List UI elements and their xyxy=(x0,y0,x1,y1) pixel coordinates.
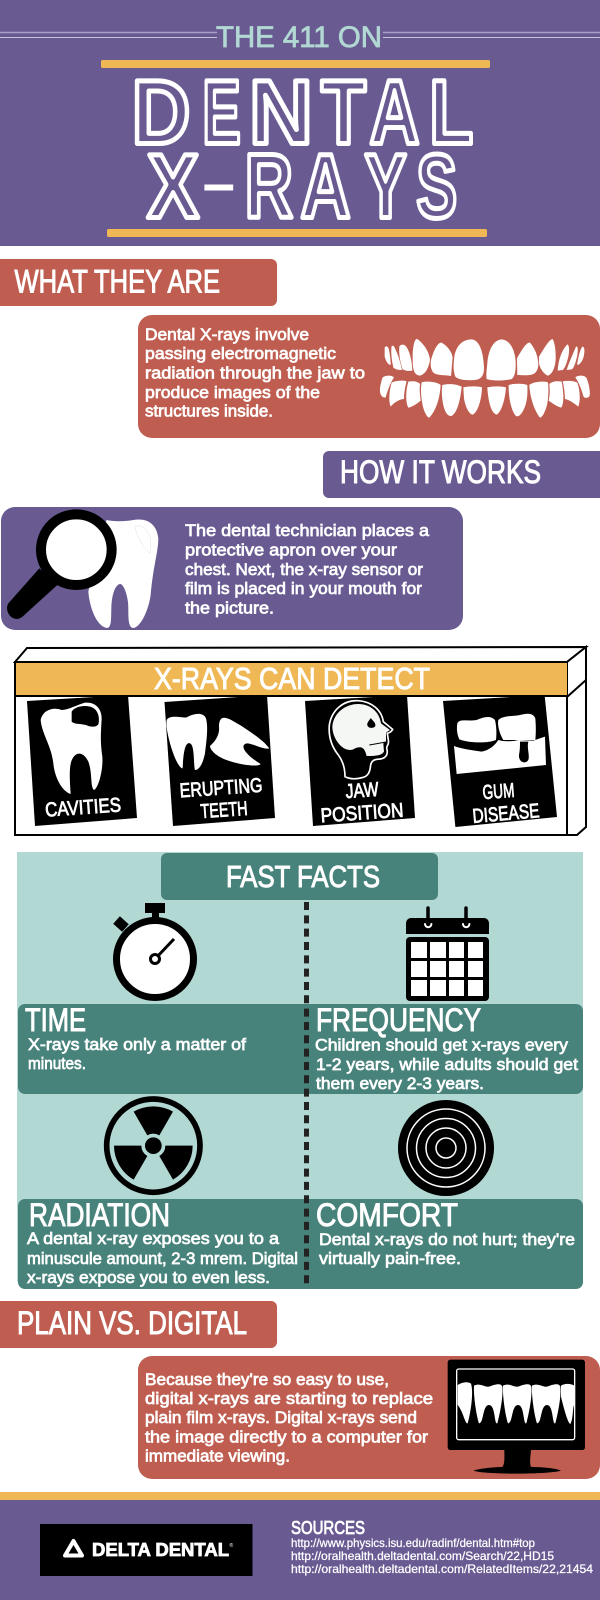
logo: delta dental: ® xyxy=(230,1542,234,1549)
card: gum disease: GUM xyxy=(482,780,515,804)
icon: target xyxy=(398,1100,494,1196)
footer xyxy=(0,1492,600,1600)
icon: teeth xyxy=(380,339,590,418)
icon: monitor with dental x-ray xyxy=(448,1360,585,1474)
title line two: X xyxy=(147,136,199,238)
card: jaw position: JAW xyxy=(345,779,379,803)
frequency text xyxy=(315,1002,578,1093)
panel: x-rays can detect xyxy=(15,647,586,835)
card: gum disease xyxy=(443,695,557,828)
title line one: T xyxy=(321,62,366,164)
box: radiation and comfort xyxy=(18,1197,583,1289)
card: erupting teeth xyxy=(164,695,275,826)
icon: magnifying glass over tooth xyxy=(7,514,158,628)
box: time and frequency xyxy=(18,1002,583,1094)
title line one: A xyxy=(370,62,420,164)
heading: how it works xyxy=(323,451,600,498)
sources: http://www.physics.isu.edu/radinf/dental.htm#top xyxy=(291,1536,535,1550)
panel: how it works xyxy=(1,507,463,630)
bottom yellow bar xyxy=(107,229,487,237)
title line one: L xyxy=(429,62,473,164)
text block xyxy=(145,1371,433,1466)
radiation text: minuscule amount, 2-3 mrem. Digital xyxy=(27,1250,298,1268)
frequency text: Children should get x-rays every xyxy=(315,1036,569,1054)
text block: chest. Next, the x-ray sensor or xyxy=(185,561,424,579)
panel: fast facts xyxy=(17,852,583,1289)
card: jaw position xyxy=(305,695,415,827)
comfort text: virtually pain-free. xyxy=(319,1250,461,1268)
text block: Dental X-rays involve xyxy=(145,326,309,344)
radiation text xyxy=(27,1197,298,1287)
time text: X-rays take only a matter of xyxy=(28,1036,246,1054)
logo: delta dental: DELTA DENTAL xyxy=(92,1540,229,1560)
sources xyxy=(291,1518,593,1576)
time text: minutes. xyxy=(28,1055,86,1073)
frequency text: them every 2-3 years. xyxy=(316,1075,484,1093)
header banner xyxy=(0,0,600,246)
text block: film is placed in your mouth for xyxy=(185,580,423,598)
radiation text: A dental x-ray exposes you to a xyxy=(27,1230,280,1248)
heading: plain vs. digital: PLAIN VS. DIGITAL xyxy=(17,1305,247,1341)
card: cavities xyxy=(27,695,137,826)
title line two: S xyxy=(416,136,457,238)
text block: passing electromagnetic xyxy=(145,345,336,363)
frequency text: FREQUENCY xyxy=(316,1002,481,1038)
logo: delta dental xyxy=(40,1524,252,1576)
title line one: D xyxy=(132,62,190,164)
text block: Because they're so easy to use, xyxy=(145,1371,389,1389)
card: cavities: CAVITIES xyxy=(44,794,122,822)
text block: The dental technician places a xyxy=(185,522,430,540)
panel: what they are xyxy=(138,315,600,438)
sources: http://oralhealth.deltadental.com/Search/22,HD15 xyxy=(291,1549,554,1563)
text block xyxy=(145,326,365,420)
radiation text: RADIATION xyxy=(29,1197,170,1233)
card: erupting teeth: ERUPTING xyxy=(179,775,263,802)
text block: structures inside. xyxy=(145,402,273,420)
heading: how it works: HOW IT WORKS xyxy=(340,454,541,490)
time text xyxy=(25,1002,246,1073)
text block: produce images of the xyxy=(145,384,320,402)
text block: the image directly to a computer for xyxy=(145,1428,429,1446)
title line one: N xyxy=(249,62,313,164)
icon: radiation xyxy=(107,1099,200,1192)
decorative title rules xyxy=(0,32,600,38)
title line two: A xyxy=(300,136,350,238)
comfort text: Dental x-rays do not hurt; they're xyxy=(319,1231,575,1249)
text block: radiation through the jaw to xyxy=(145,364,365,382)
card: erupting teeth: TEETH xyxy=(200,798,248,823)
icon: stopwatch xyxy=(113,903,194,998)
card: jaw position: POSITION xyxy=(320,800,404,827)
text block xyxy=(185,522,430,618)
sources: SOURCES xyxy=(291,1518,365,1538)
comfort text: COMFORT xyxy=(316,1197,458,1233)
yellow heading band xyxy=(15,661,567,696)
heading: fast facts xyxy=(161,853,438,900)
sources: http://oralhealth.deltadental.com/RelatedItems/22,21454 xyxy=(291,1562,593,1576)
title line two: R xyxy=(245,136,293,238)
heading: fast facts: FAST FACTS xyxy=(226,859,380,894)
text block: protective apron over your xyxy=(185,542,398,560)
comfort text xyxy=(316,1197,575,1268)
dashed divider xyxy=(304,902,309,1285)
title line two: Y xyxy=(364,136,407,238)
card: gum disease: DISEASE xyxy=(472,800,540,828)
top yellow bar xyxy=(101,60,490,68)
panel: plain vs. digital xyxy=(138,1356,600,1479)
icon: calendar xyxy=(406,908,489,1001)
subtitle: THE 411 ON xyxy=(216,21,382,54)
heading: what they are: WHAT THEY ARE xyxy=(14,264,220,300)
title line two: - xyxy=(200,156,238,212)
text block: the picture. xyxy=(185,600,274,618)
text block: digital x-rays are starting to replace xyxy=(145,1390,433,1408)
3d box frame xyxy=(15,647,586,835)
yellow heading band: X-RAYS CAN DETECT xyxy=(154,661,430,696)
heading: plain vs. digital xyxy=(0,1301,277,1348)
text block: plain film x-rays. Digital x-rays send xyxy=(145,1409,417,1427)
time text: TIME xyxy=(25,1002,86,1038)
text block: immediate viewing. xyxy=(145,1448,290,1466)
frequency text: 1-2 years, while adults should get xyxy=(316,1056,578,1074)
radiation text: x-rays expose you to even less. xyxy=(27,1269,270,1287)
title line one: E xyxy=(202,62,241,164)
